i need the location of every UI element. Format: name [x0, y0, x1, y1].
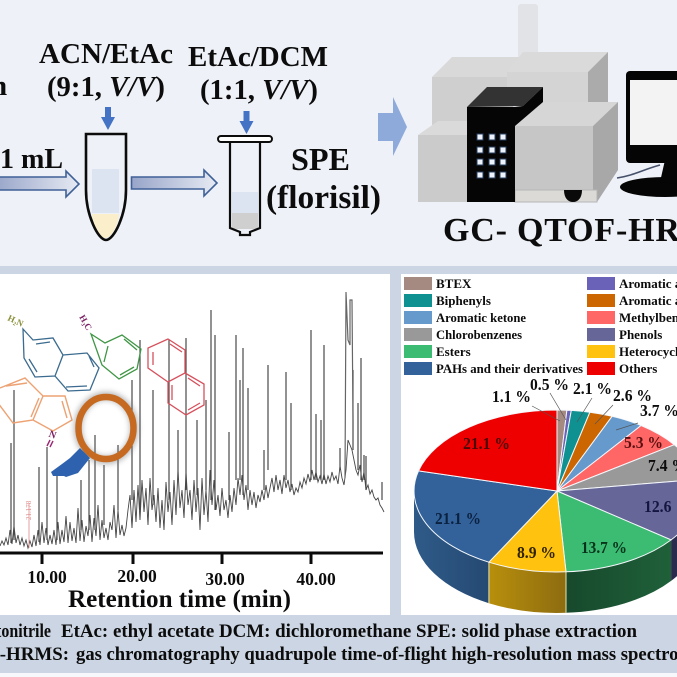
bottom white strip	[0, 673, 677, 677]
legend right column	[587, 276, 677, 376]
chart: x axis	[0, 553, 383, 589]
panel: chromatogram	[0, 274, 390, 615]
axis tick labels: 40.00	[296, 569, 336, 589]
arrow: solvent into tube	[101, 107, 115, 130]
footnote: abbreviations	[0, 621, 677, 665]
label: 9:1 ratio: (9:1, V/V)	[47, 71, 165, 103]
arrow: to instrument	[378, 97, 407, 156]
legend left column: Chlorobenzenes	[436, 327, 522, 342]
icon: centrifuge tube	[86, 134, 126, 240]
slice value labels: 21.1 %	[463, 434, 510, 453]
label: SPE: SPE	[291, 141, 350, 177]
leader lines	[532, 393, 638, 430]
retention time marker: 21.178	[25, 500, 33, 520]
arrow: to centrifuge tube	[0, 171, 79, 197]
amine label: H₂N	[6, 313, 26, 329]
molecule: aminonaphthalene	[6, 313, 99, 391]
nitrile label: N	[47, 429, 58, 442]
label: florisil: (florisil)	[266, 180, 381, 216]
label: EtAc/DCM: EtAc/DCM	[188, 41, 328, 73]
arrow: to SPE	[132, 170, 217, 196]
slice value labels: 8.9 %	[517, 543, 556, 562]
footnote: abbreviations: EtAc: ethyl acetate DCM: dichloromethane SPE: solid phase extraction	[61, 621, 637, 642]
label: ACN/EtAc: ACN/EtAc	[39, 38, 173, 70]
axis title: Retention time (min)	[68, 586, 291, 613]
icon: SPE cartridge	[218, 136, 272, 235]
legend right column: Others	[619, 361, 657, 376]
icon: GC-QTOF instrument	[418, 4, 618, 202]
legend left column: Esters	[436, 344, 471, 359]
molecule: toluene ring	[77, 313, 141, 379]
legend left column: BTEX	[436, 276, 472, 291]
axis tick labels: 30.00	[205, 569, 245, 589]
legend left column	[404, 276, 583, 376]
panel: pie chart and legend	[401, 274, 677, 615]
slice value labels	[435, 375, 677, 562]
slice value labels: 0.5 %	[530, 375, 569, 394]
slice value labels: 5.3 %	[624, 433, 663, 452]
legend left column: Aromatic ketone	[436, 310, 526, 325]
legend left column: PAHs and their derivatives	[436, 361, 583, 376]
chart: 3D pie	[414, 375, 677, 613]
label: volume: 1 mL	[0, 144, 63, 175]
axis tick labels: 20.00	[117, 566, 157, 586]
pie sides	[414, 491, 677, 613]
slice value labels: 21.1 %	[435, 509, 481, 528]
instrument keypad	[477, 134, 506, 178]
legend	[404, 276, 677, 376]
methyl label: H₃C	[77, 313, 94, 332]
molecule: naphthalene red	[148, 339, 204, 415]
axis tick labels	[27, 566, 336, 589]
legend left column: Biphenyls	[436, 293, 491, 308]
arrow: solvent into SPE	[240, 111, 254, 134]
slice value labels: 2.6 %	[613, 386, 652, 405]
retention time marker	[25, 500, 33, 548]
pie top slices	[414, 410, 677, 572]
axis tick labels: 10.00	[27, 567, 67, 587]
label: 1:1 ratio: (1:1, V/V)	[200, 74, 318, 106]
chart: total ion chromatogram trace	[0, 292, 384, 548]
molecule: indole orange	[0, 378, 72, 447]
panel: sample preparation and instrument	[0, 0, 677, 266]
legend right column: Phenols	[619, 327, 662, 342]
slice value labels: 1.1 %	[492, 387, 531, 406]
slice value labels: 2.1 %	[573, 379, 612, 398]
icon: computer monitor	[617, 71, 677, 197]
icon: magnifier	[51, 396, 134, 477]
slice value labels: 13.7 %	[581, 538, 627, 557]
